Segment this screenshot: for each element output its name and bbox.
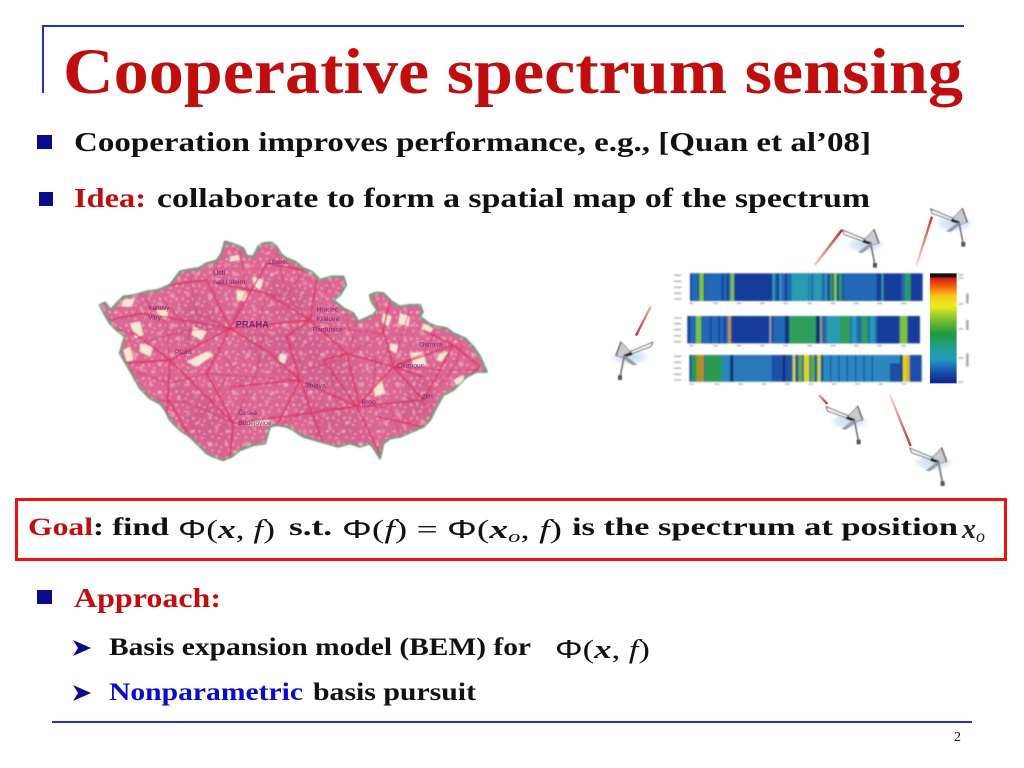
city labels: Budějovice [238, 420, 271, 427]
city labels: Liberec [268, 259, 289, 266]
city labels: Jihlava [305, 382, 326, 389]
goal box: , [520, 515, 539, 544]
title frame [43, 26, 964, 93]
goal box: Φ (f) = Φ (x [342, 514, 502, 544]
sub-bullet: basis expansion model: Φ (x, f) [555, 634, 650, 664]
sub-bullet: basis expansion model [73, 634, 650, 664]
goal box: : find [93, 514, 169, 541]
bullet: cooperation improves performance: Cooperation improves performance, e.g., [Quan et al’08] [74, 127, 871, 157]
bullet: approach: Approach: [74, 583, 221, 613]
axis tick marks [674, 274, 969, 385]
goal box [16, 500, 1006, 560]
goal box: o [508, 527, 520, 546]
sub-bullet: basis expansion model: Basis expansion model (BEM) for [109, 634, 531, 661]
radio: top centre [815, 229, 888, 268]
goal box: Goal [28, 514, 93, 541]
dense pink zones [184, 288, 426, 446]
city labels: Plzeň [175, 349, 192, 356]
city labels: Karlovy [148, 305, 170, 312]
thin road network [110, 250, 483, 437]
radio: left [607, 307, 653, 380]
sub-bullet: nonparametric basis pursuit: basis pursuit [313, 679, 477, 706]
sub-bullet: nonparametric basis pursuit [73, 679, 477, 706]
city labels: Olomouc [397, 362, 425, 369]
colour scale [930, 273, 957, 383]
city labels: Vary [148, 314, 162, 321]
goal box: Φ (x, f) [178, 514, 275, 544]
city labels: Pardubice [313, 327, 343, 334]
spectrogram panel 1 [690, 273, 923, 301]
radio: bottom right [890, 395, 956, 486]
sub-bullet: nonparametric basis pursuit: Nonparametric [109, 679, 303, 706]
title: Cooperative spectrum sensing [63, 36, 963, 108]
bullet: approach [37, 583, 221, 613]
city labels: Králové [317, 316, 340, 323]
bullet: idea: collaborate to form a spatial map of the spectrum [157, 183, 871, 213]
city labels: Ostrava [419, 342, 443, 349]
map of spectrum coverage [98, 240, 489, 462]
city labels: Ústí [213, 268, 226, 277]
main roads [110, 263, 480, 457]
goal box: f) [539, 515, 558, 544]
radio: bottom centre [819, 395, 872, 444]
footer rule [52, 721, 972, 723]
bullet: idea [39, 183, 871, 213]
goal box: s.t. [289, 514, 332, 541]
city labels: PRAHA [236, 320, 269, 330]
spectrum map figure with sensing radios [607, 208, 977, 486]
spectrogram panel 2 [687, 316, 920, 343]
city labels [148, 259, 443, 427]
city labels: Hradec [317, 307, 339, 314]
bullet: idea: Idea: [74, 183, 146, 213]
city labels: nad Labem [213, 279, 245, 286]
spectrogram panel 3 [689, 355, 922, 382]
cream patches [122, 255, 465, 425]
city labels: České [238, 408, 257, 417]
goal box: o [976, 526, 985, 546]
city labels: Brno [362, 399, 376, 406]
radio: top right [917, 208, 977, 265]
goal box: is the spectrum at position [572, 514, 958, 541]
page number: 2 [954, 730, 961, 745]
goal box: x [962, 514, 976, 545]
city labels: Zlín [422, 393, 433, 400]
